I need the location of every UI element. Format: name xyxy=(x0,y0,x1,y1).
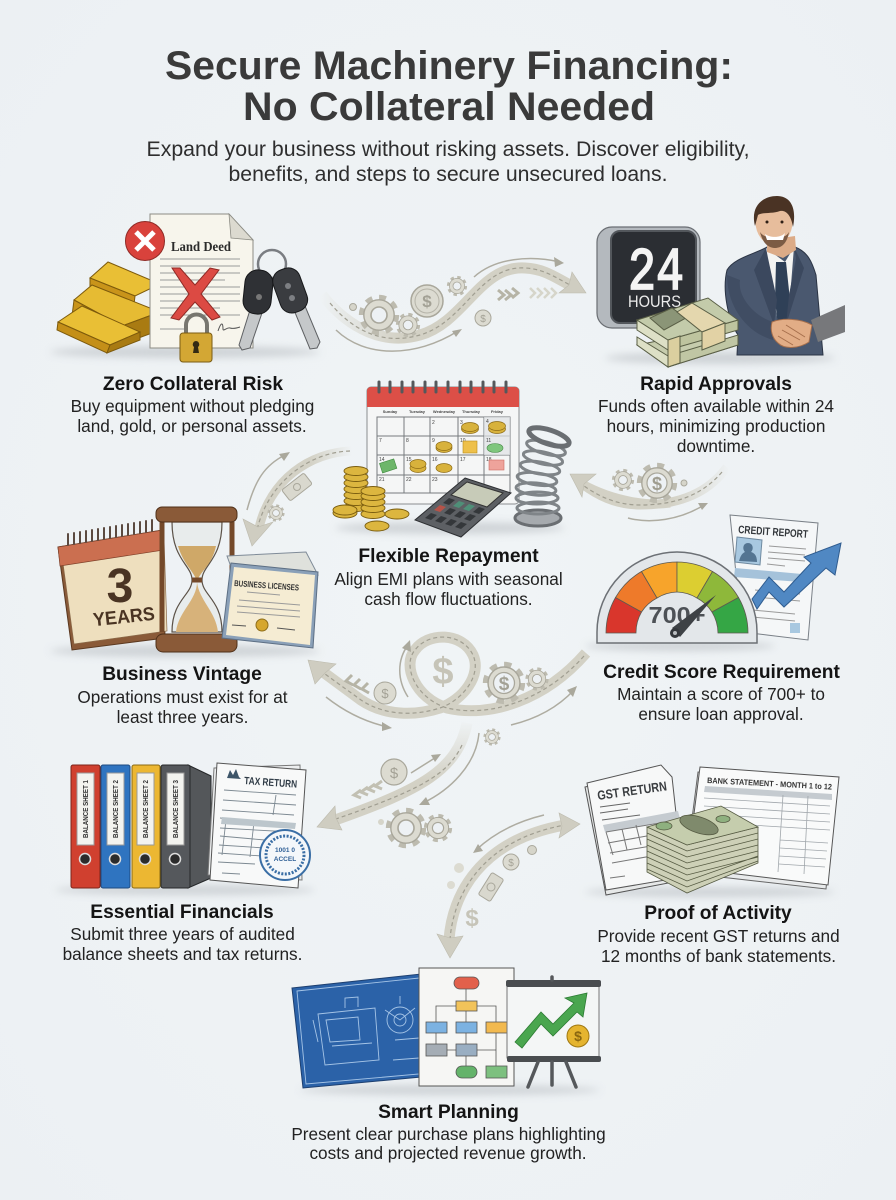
tax return title: TAX RETURN xyxy=(244,775,297,791)
icon: calendar, coins, calculator and spring: 10 xyxy=(460,438,466,444)
subtitle: Expand your business without risking assets. Discover eligibility, xyxy=(146,138,750,161)
tax stamp xyxy=(260,830,310,880)
arrow: collateral to approvals: $ xyxy=(422,292,432,311)
yellow binder xyxy=(132,765,160,888)
gears and coins xyxy=(362,298,396,332)
heading: business vintage: Business Vintage xyxy=(102,664,262,685)
subtitle xyxy=(146,138,750,186)
text: proof of activity: Provide recent GST returns and xyxy=(597,926,840,946)
text: credit score requirement: ensure loan approval. xyxy=(638,704,804,724)
heading: rapid approvals: Rapid Approvals xyxy=(640,374,792,395)
arrow: approvals to repayment xyxy=(570,466,727,521)
heading: flexible repayment: Flexible Repayment xyxy=(358,546,539,567)
arrow: collateral to approvals: $ xyxy=(480,314,486,325)
heading: essential financials: Essential Financials xyxy=(90,902,274,923)
icon: calendar, coins, calculator and spring: 3 xyxy=(460,420,463,426)
text: rapid approvals: Funds often available within 24 xyxy=(598,396,834,416)
icon: blueprint, flowchart and growth board xyxy=(292,968,601,1095)
blueprint xyxy=(292,974,421,1088)
flowchart sheet xyxy=(419,968,514,1086)
heading: credit score requirement: Credit Score Requirement xyxy=(603,662,840,683)
icon: calendar, coins, calculator and spring: 17 xyxy=(460,457,466,463)
icon: binders and tax return xyxy=(55,763,315,895)
red binder: BALANCE SHEET 1 xyxy=(83,780,90,838)
icon: calendar, coins, calculator and spring: 11 xyxy=(486,438,491,444)
cash stack xyxy=(637,298,738,367)
heading: proof of activity: Proof of Activity xyxy=(644,903,792,924)
arrow: financials to planning: $ xyxy=(508,858,514,869)
text: credit score requirement: Maintain a score of 700+ to xyxy=(617,684,825,704)
icon: gauge and credit report xyxy=(585,515,841,651)
title xyxy=(165,44,733,129)
text: rapid approvals xyxy=(598,396,834,456)
icon: calendar, coins, calculator and spring: Thursday xyxy=(462,409,481,414)
icon: calendar, coins, calculator and spring: 8 xyxy=(406,438,409,444)
icon: GST return, bank statement and cash xyxy=(585,765,839,897)
cash pile xyxy=(647,806,758,893)
text: proof of activity xyxy=(597,926,840,966)
text: smart planning: Present clear purchase plans highlighting xyxy=(291,1124,606,1144)
dollar coin xyxy=(567,1025,589,1047)
icon: calendar, coins, calculator and spring: 21 xyxy=(379,477,385,483)
arrow: central knot xyxy=(308,637,586,744)
subtitle: benefits, and steps to secure unsecured loans. xyxy=(228,163,668,186)
icon: calendar, coins, calculator and spring: 18 xyxy=(486,457,492,463)
blue binder: BALANCE SHEET 2 xyxy=(113,780,120,838)
score: 700+ xyxy=(648,602,706,628)
blue binder xyxy=(101,765,130,888)
padlock xyxy=(186,314,207,335)
red binder xyxy=(71,765,100,888)
grey binder: BALANCE SHEET 3 xyxy=(173,780,180,838)
text: smart planning: costs and projected revenue growth. xyxy=(309,1143,587,1163)
icon: calendar, coins, calculator and spring: 9 xyxy=(432,438,435,444)
GST title: GST RETURN xyxy=(596,778,668,803)
icon: 24 hours, cash and handshake xyxy=(597,196,845,367)
text: rapid approvals: hours, minimizing production xyxy=(607,416,825,436)
text: rapid approvals: downtime. xyxy=(677,436,755,456)
text: smart planning xyxy=(291,1124,606,1163)
text: essential financials xyxy=(63,924,302,964)
icon: calendar, coins, calculator and spring: Sunday xyxy=(383,409,398,414)
credit report xyxy=(730,515,818,640)
arrow: central knot: $ xyxy=(381,686,389,701)
text: proof of activity: 12 months of bank statements. xyxy=(601,946,836,966)
tax return form xyxy=(208,765,302,880)
land deed paper xyxy=(150,214,253,348)
title: Secure Machinery Financing: xyxy=(165,44,733,88)
coin stacks xyxy=(333,466,409,531)
text: credit score requirement xyxy=(617,684,825,724)
icon: blueprint, flowchart and growth board: $ xyxy=(574,1028,582,1044)
text: business vintage: Operations must exist for at xyxy=(77,687,288,707)
text: essential financials: Submit three years of audited xyxy=(70,924,295,944)
tax stamp: ACCEL xyxy=(274,856,296,863)
arrow: central knot: $ xyxy=(499,674,510,695)
grey binder xyxy=(161,765,211,888)
digital 24: 24 xyxy=(628,240,684,308)
icon: gold, land deed and keys xyxy=(50,214,320,362)
icon: calendar, coins, calculator and spring: 2 xyxy=(432,420,435,426)
arrow: collateral to approvals xyxy=(322,257,586,351)
text: zero collateral risk: Buy equipment without pledging xyxy=(71,396,314,416)
text: zero collateral risk xyxy=(71,396,314,436)
icon: calendar, coins, calculator and spring: 4 xyxy=(486,419,489,425)
GST return xyxy=(585,770,684,895)
icon: calendar, coins, calculator and spring xyxy=(333,382,571,537)
car keys xyxy=(239,250,320,350)
text: flexible repayment: Align EMI plans with seasonal xyxy=(334,569,563,589)
dollar sign: $ xyxy=(432,651,454,693)
arrow: repayment to vintage xyxy=(243,451,352,546)
tear-off calendar xyxy=(58,530,165,650)
text: flexible repayment: cash flow fluctuations. xyxy=(364,589,533,609)
gauge dial xyxy=(597,552,757,643)
icon: calendar, coins, calculator and spring: 14 xyxy=(379,457,385,463)
yellow binder: BALANCE SHEET 2 xyxy=(143,780,150,838)
icon: calendar, coins, calculator and spring: 15 xyxy=(406,457,412,463)
hours label: HOURS xyxy=(628,292,681,311)
text: flexible repayment xyxy=(334,569,563,609)
icon: calendar, coins, calculator and spring: Wednesday xyxy=(433,409,456,414)
arrow: financials to planning: $ xyxy=(465,905,479,932)
text: business vintage: least three years. xyxy=(117,707,248,727)
icon: calendar, coins, calculator and spring: Tuesday xyxy=(409,409,426,414)
growth arrow xyxy=(515,993,587,1048)
icon: calendar, coins, calculator and spring: 7 xyxy=(379,438,382,444)
deed title: Land Deed xyxy=(171,239,231,254)
gold bars xyxy=(57,262,160,353)
icon: calendar, coins, calculator and spring: Friday xyxy=(491,409,504,414)
timer tile xyxy=(597,227,700,328)
red cross xyxy=(171,268,220,320)
heading: zero collateral risk: Zero Collateral Risk xyxy=(103,374,283,395)
growth arrow xyxy=(752,543,841,609)
icon: calendar, coins, calculator and spring: 16 xyxy=(432,457,438,463)
calendar xyxy=(367,387,519,504)
text: essential financials: balance sheets and tax returns. xyxy=(63,944,302,964)
license title: BUSINESS LICENSES xyxy=(234,578,300,593)
presentation board xyxy=(507,986,599,1058)
arrow: knot to financials: $ xyxy=(390,765,399,782)
arrow: financials to planning xyxy=(437,813,580,958)
title: No Collateral Needed xyxy=(243,85,655,129)
icon: calendar, coins, calculator and spring: 22 xyxy=(406,477,412,483)
rejected badge xyxy=(126,222,164,260)
hourglass xyxy=(156,507,237,652)
arrow: knot to financials xyxy=(317,723,479,845)
bank title: BANK STATEMENT - MONTH 1 to 12 xyxy=(707,776,833,792)
arrow: approvals to repayment: $ xyxy=(652,474,662,494)
calculator xyxy=(415,478,511,537)
spring xyxy=(515,424,571,526)
text: zero collateral risk: land, gold, or personal assets. xyxy=(77,416,307,436)
report title: CREDIT REPORT xyxy=(738,524,809,541)
license certificates xyxy=(227,552,318,578)
icon: three years, hourglass and licenses xyxy=(50,507,320,657)
text: business vintage xyxy=(77,687,288,727)
bank statement xyxy=(685,772,836,889)
calendar number: 3 xyxy=(107,560,133,613)
icon: calendar, coins, calculator and spring: 23 xyxy=(432,477,438,483)
calendar label: YEARS xyxy=(92,604,156,631)
businessman xyxy=(725,196,845,355)
tax stamp: 1001 0 xyxy=(275,847,295,854)
heading: smart planning: Smart Planning xyxy=(378,1102,519,1123)
needle xyxy=(672,595,716,637)
